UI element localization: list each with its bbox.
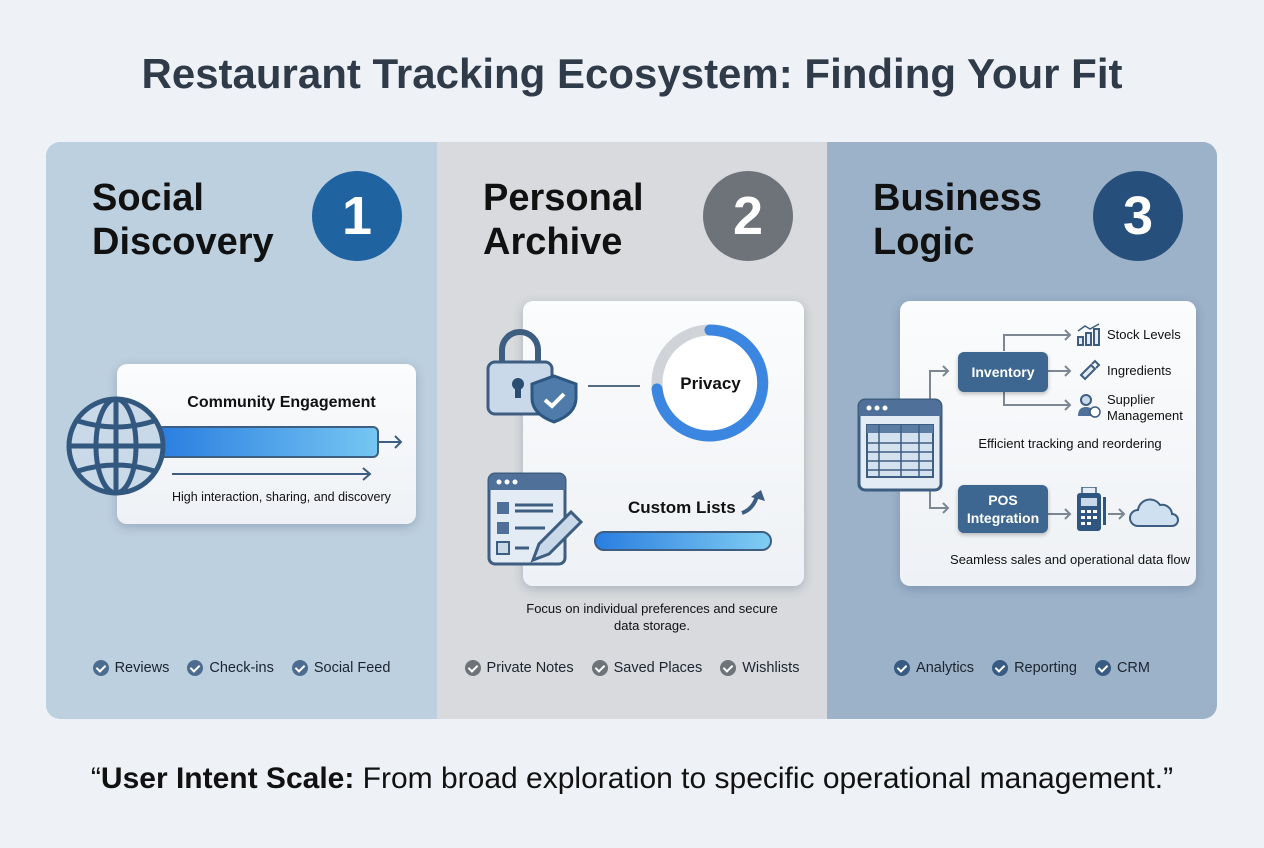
card: privacy and lists — [523, 301, 804, 586]
icon: lock with shield — [486, 329, 578, 424]
connector — [588, 385, 640, 387]
arrows — [172, 435, 402, 481]
tags: Social Feed — [314, 660, 390, 676]
tags: Analytics — [916, 660, 974, 676]
icon: supplier — [1078, 394, 1101, 418]
pos box — [958, 485, 1048, 533]
card: community engagement — [117, 364, 416, 524]
tags — [894, 660, 1150, 676]
icon: checklist with pen — [488, 472, 583, 566]
heading: personal archive — [483, 177, 644, 263]
caption: Focus on individual preferences and secure data storage. — [526, 601, 778, 633]
heading: social discovery: Social — [92, 177, 204, 219]
tags: Check-ins — [209, 660, 274, 676]
bar — [157, 426, 379, 458]
tags: Private Notes — [487, 660, 574, 676]
bar — [594, 531, 772, 551]
card caption: High interaction, sharing, and discovery — [172, 490, 391, 504]
icon: spreadsheet window — [858, 398, 942, 492]
card: operations — [900, 301, 1196, 586]
title: Restaurant Tracking Ecosystem: Finding Your Fit — [142, 50, 1122, 97]
badge 3 — [1093, 171, 1183, 261]
badge 2 — [703, 171, 793, 261]
panel: social discovery — [46, 142, 437, 719]
card heading: Community Engagement — [187, 394, 376, 411]
supplier management — [1107, 392, 1183, 423]
panel: business logic — [827, 142, 1217, 719]
stock levels: Stock Levels — [1107, 327, 1181, 342]
heading: social discovery — [92, 177, 274, 263]
tags: Wishlists — [742, 660, 799, 676]
tags: Reporting — [1014, 660, 1077, 676]
panels container — [46, 142, 1217, 719]
custom lists label: Custom Lists — [628, 498, 736, 517]
badge 3: 3 — [1123, 186, 1153, 246]
icon: up arrow — [741, 490, 765, 515]
badge 2: 2 — [733, 186, 763, 246]
pos box: POS — [988, 492, 1018, 508]
tags — [465, 660, 799, 676]
inventory caption: Efficient tracking and reordering — [978, 436, 1162, 451]
heading: business logic — [873, 177, 1042, 263]
icon: cloud — [1129, 498, 1179, 527]
pos caption: Seamless sales and operational data flow — [950, 552, 1190, 567]
inventory box: Inventory — [971, 364, 1034, 380]
supplier management: Supplier — [1107, 392, 1155, 407]
icon: card terminal — [1077, 487, 1106, 531]
icon: globe — [66, 396, 166, 496]
heading: business logic: Logic — [873, 221, 974, 263]
badge 1: 1 — [342, 186, 372, 246]
badge 1 — [312, 171, 402, 261]
heading: business logic: Business — [873, 177, 1042, 219]
privacy ring — [652, 324, 768, 442]
tags — [93, 660, 390, 676]
tags: CRM — [1117, 660, 1150, 676]
tags: Saved Places — [614, 660, 702, 676]
footer quote: “User Intent Scale: From broad exploration to specific operational management.” — [91, 762, 1173, 795]
flow lines — [929, 329, 1126, 520]
heading: personal archive: Archive — [483, 221, 622, 263]
ingredients: Ingredients — [1107, 363, 1171, 378]
inventory box — [958, 352, 1048, 392]
panel: personal archive — [437, 142, 827, 719]
heading: personal archive: Personal — [483, 177, 644, 219]
icon: bottle — [1080, 360, 1100, 380]
privacy label: Privacy — [680, 374, 741, 393]
supplier management: Management — [1107, 408, 1183, 423]
heading: social discovery: Discovery — [92, 221, 274, 263]
pos box: Integration — [967, 510, 1039, 526]
icon: stock chart — [1077, 323, 1100, 346]
tags: Reviews — [115, 660, 169, 676]
